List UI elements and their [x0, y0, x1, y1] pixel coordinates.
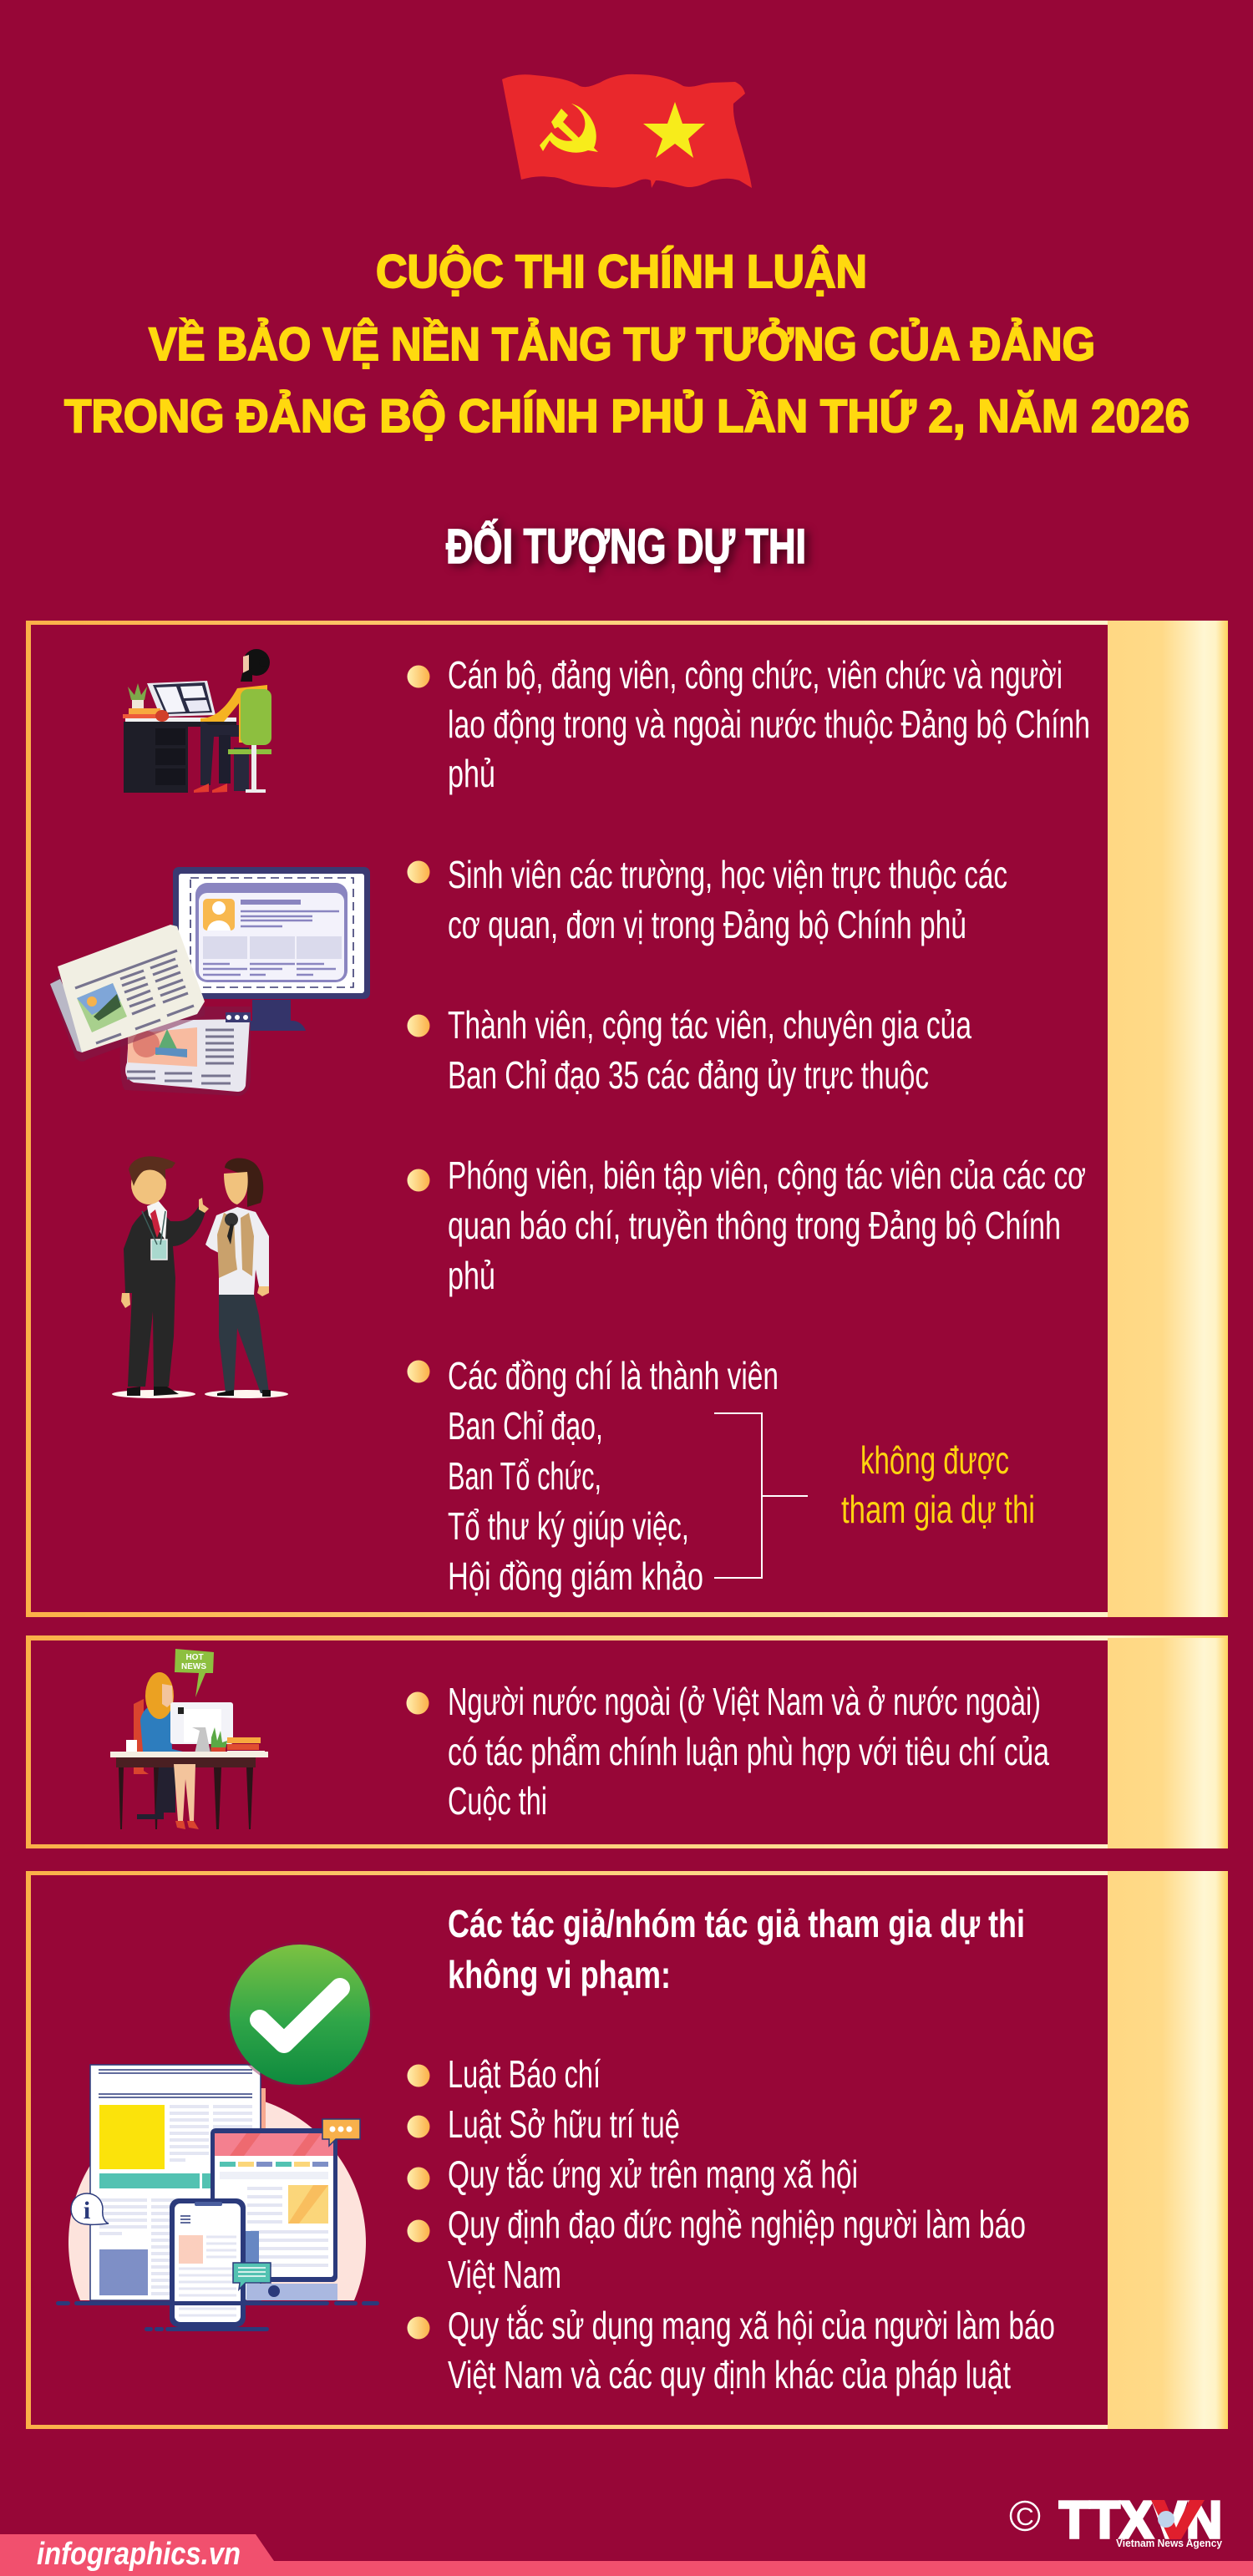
list: foreigners bullet: Cuộc thi	[448, 1779, 547, 1823]
callout: không được tham gia dự thi: không được	[860, 1438, 1009, 1482]
list: foreigners bullet: có tác phẩm chính luận phù hợp với tiêu chí của	[448, 1730, 1049, 1773]
icon: star	[643, 102, 705, 158]
list: main eligibility bullets: phủ	[448, 752, 495, 795]
icon: interviewer and reporter	[112, 1156, 288, 1398]
title: VỀ BẢO VỆ NỀN TẢNG TƯ TƯỞNG CỦA ĐẢNG	[149, 317, 1095, 370]
title: TRONG ĐẢNG BỘ CHÍNH PHỦ LẦN THỨ 2, NĂM 2026	[64, 389, 1190, 442]
logo: TTXVN copyright: Vietnam News Agency	[1116, 2537, 1223, 2549]
list: no violation rules: Việt Nam và các quy định khác của pháp luật	[448, 2353, 1011, 2396]
list: main eligibility bullets: phủ	[448, 1254, 495, 1297]
list: foreigners bullet	[406, 1680, 1049, 1823]
logo: TTXVN copyright: TTXVN	[1059, 2492, 1222, 2549]
title: CUỘC THI CHÍNH LUẬN	[376, 245, 867, 297]
list: no violation rules: Quy định đạo đức nghề nghiệp người làm báo	[448, 2203, 1026, 2246]
icon: woman at computer with hot news bubble	[110, 1649, 268, 1829]
heading: đối tượng dự thi: ĐỐI TƯỢNG DỰ THI	[446, 520, 806, 574]
list: no violation rules: Luật Sở hữu trí tuệ	[448, 2102, 680, 2146]
logo: TTXVN copyright: C	[1016, 2503, 1034, 2531]
panel: foreigners	[26, 1635, 1228, 1848]
footer: infographics.vn: infographics.vn	[37, 2537, 241, 2572]
panel: no violations	[26, 1871, 1228, 2429]
list: no violation rules: không vi phạm:	[448, 1953, 671, 1996]
list: no violation rules: Quy tắc ứng xử trên mạng xã hội	[448, 2153, 858, 2196]
list: main eligibility bullets	[408, 653, 1090, 1598]
panel: main eligibility list	[26, 621, 1228, 1617]
icon: newspaper, tablet, phone and checkmark: i	[84, 2197, 90, 2224]
icon: newspaper, tablet, phone and checkmark	[56, 1942, 379, 2331]
list: main eligibility bullets: quan báo chí, truyền thông trong Đảng bộ Chính	[448, 1204, 1061, 1247]
callout: không được tham gia dự thi	[841, 1438, 1035, 1531]
icon: monitor and newspapers	[50, 867, 370, 1096]
callout: không được tham gia dự thi: tham gia dự thi	[841, 1488, 1035, 1531]
bracket connector	[714, 1413, 808, 1578]
list: main eligibility bullets: Sinh viên các trường, học viện trực thuộc các	[448, 853, 1007, 896]
icon: woman at computer with hot news bubble: HOT	[185, 1653, 204, 1662]
list: no violation rules: Các tác giả/nhóm tác giả tham gia dự thi	[448, 1902, 1025, 1945]
list: main eligibility bullets: Tổ thư ký giúp việc,	[448, 1504, 689, 1548]
list: no violation rules	[408, 1902, 1055, 2396]
list: main eligibility bullets: Ban Chỉ đạo 35 các đảng ủy trực thuộc	[448, 1053, 929, 1097]
footer bar	[0, 2534, 1253, 2576]
list: main eligibility bullets: Ban Tổ chức,	[448, 1454, 601, 1498]
icon: party flag	[502, 74, 752, 188]
icon: hammer and sickle	[540, 104, 598, 153]
icon: person working at desk	[123, 649, 271, 793]
list: main eligibility bullets: Ban Chỉ đạo,	[448, 1404, 603, 1448]
list: no violation rules: Luật Báo chí	[448, 2052, 601, 2096]
icon: woman at computer with hot news bubble: NEWS	[181, 1662, 206, 1671]
list: no violation rules: Việt Nam	[448, 2253, 561, 2296]
list: main eligibility bullets: Hội đồng giám khảo	[448, 1554, 703, 1598]
list: main eligibility bullets: Thành viên, cộng tác viên, chuyên gia của	[448, 1003, 971, 1047]
title	[64, 245, 1190, 442]
list: main eligibility bullets: Các đồng chí là thành viên	[448, 1354, 779, 1397]
list: main eligibility bullets: cơ quan, đơn vị trong Đảng bộ Chính phủ	[448, 903, 966, 946]
